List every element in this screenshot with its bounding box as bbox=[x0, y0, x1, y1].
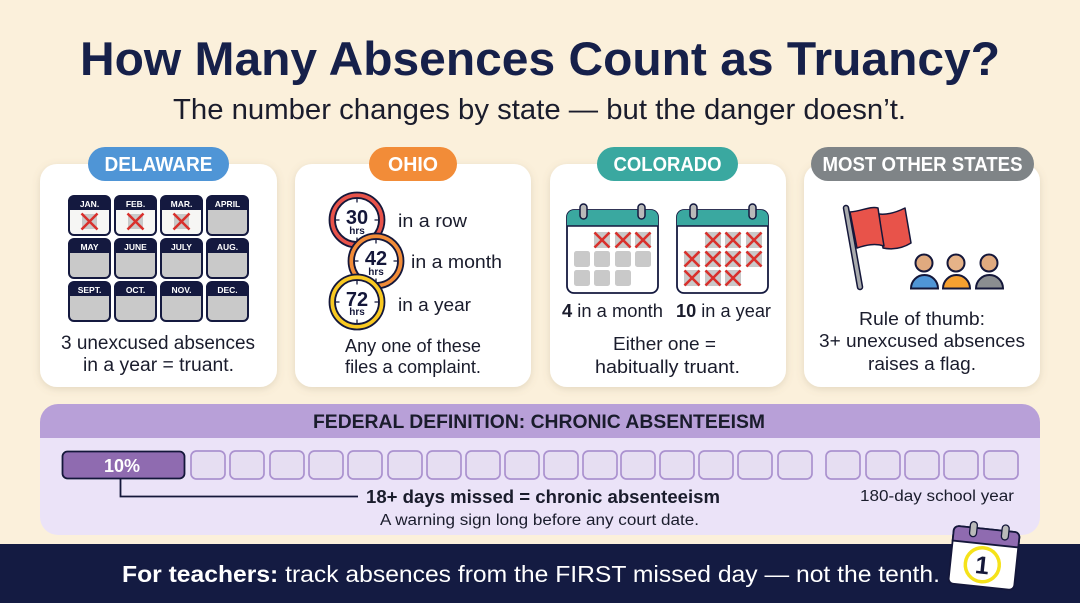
school year label: 180-day school year bbox=[860, 488, 1014, 505]
school year day blocks bbox=[191, 451, 1018, 479]
Colorado calendar labels: 10 in a year bbox=[676, 301, 771, 321]
panel: Delaware bbox=[40, 147, 277, 387]
panel: Ohio bbox=[295, 147, 531, 387]
most other states label: MOST OTHER STATES bbox=[822, 154, 1022, 176]
Delaware caption: in a year = truant. bbox=[83, 355, 234, 376]
icon: 30 hours clock bbox=[330, 192, 384, 248]
Delaware label: DELAWARE bbox=[104, 154, 212, 176]
icon: month calendar with 10 limit bbox=[677, 204, 768, 293]
most other states caption: Rule of thumb: bbox=[859, 308, 985, 329]
icon: 72 hours clock bbox=[330, 274, 384, 330]
icon: twelve month calendars: NOV. bbox=[171, 285, 192, 295]
panel: Colorado bbox=[550, 147, 786, 387]
icon: twelve month calendars: SEPT. bbox=[78, 285, 101, 295]
icon: month calendar with 4 limit bbox=[567, 204, 658, 293]
Ohio label bbox=[369, 147, 457, 181]
most other states caption: raises a flag. bbox=[868, 353, 976, 374]
icon: 42 hours clock: hrs bbox=[368, 267, 384, 278]
teacher tip: For teachers: track absences from the FIRST missed day — not the tenth. bbox=[122, 561, 940, 587]
icon: twelve month calendars: OCT. bbox=[126, 285, 145, 295]
10 percent block: 10% bbox=[104, 456, 140, 476]
icon: 30 hours clock: 30 bbox=[346, 207, 368, 229]
federal heading: FEDERAL DEFINITION: CHRONIC ABSENTEEISM bbox=[313, 411, 765, 433]
icon: 72 hours clock: 72 bbox=[346, 289, 368, 311]
icon: red flag bbox=[846, 208, 911, 287]
10 percent block bbox=[62, 452, 184, 478]
icon: twelve month calendars: JULY bbox=[171, 242, 192, 252]
icon: 72 hours clock: hrs bbox=[349, 307, 365, 318]
Ohio caption bbox=[345, 336, 481, 377]
Colorado caption bbox=[595, 333, 740, 377]
icon: day one calendar: 1 bbox=[974, 551, 991, 580]
Colorado label: COLORADO bbox=[614, 154, 722, 176]
Colorado calendar labels bbox=[562, 301, 771, 321]
footer bar bbox=[0, 544, 1080, 603]
panel: most other states bbox=[804, 147, 1040, 387]
icon: day one calendar bbox=[948, 520, 1020, 590]
warning note: A warning sign long before any court date. bbox=[380, 512, 699, 529]
most other states caption: 3+ unexcused absences bbox=[819, 330, 1025, 351]
Delaware label bbox=[88, 147, 229, 181]
chronic absenteeism statement: 18+ days missed = chronic absenteeism bbox=[366, 486, 720, 507]
Delaware caption bbox=[61, 333, 255, 376]
Colorado calendar labels: 4 in a month bbox=[562, 301, 663, 321]
icon: twelve month calendars: MAR. bbox=[171, 199, 192, 209]
icon: twelve month calendars bbox=[69, 196, 248, 321]
Colorado caption: Either one = bbox=[613, 333, 716, 354]
icon: twelve month calendars: AUG. bbox=[217, 242, 238, 252]
Ohio time labels: in a row bbox=[398, 210, 468, 231]
icon: twelve month calendars: MAY bbox=[80, 242, 99, 252]
icon: 30 hours clock: hrs bbox=[349, 226, 365, 237]
icon: twelve month calendars: APRIL bbox=[215, 199, 240, 209]
Ohio time labels: in a month bbox=[411, 251, 502, 272]
Ohio caption: files a complaint. bbox=[345, 357, 481, 377]
Colorado caption: habitually truant. bbox=[595, 356, 740, 377]
Ohio label: OHIO bbox=[388, 154, 438, 176]
Ohio time labels bbox=[398, 210, 502, 315]
most other states label bbox=[811, 147, 1034, 181]
Colorado label bbox=[597, 147, 738, 181]
icon: twelve month calendars: JUNE bbox=[124, 242, 147, 252]
subtitle: The number changes by state — but the danger doesn’t. bbox=[173, 94, 906, 126]
title: How Many Absences Count as Truancy? bbox=[80, 32, 1000, 85]
icon: 42 hours clock: 42 bbox=[365, 248, 387, 270]
panel: federal definition bbox=[40, 404, 1040, 535]
Ohio time labels: in a year bbox=[398, 294, 471, 315]
icon: twelve month calendars: JAN. bbox=[80, 199, 99, 209]
most other states caption bbox=[819, 308, 1025, 374]
icon: twelve month calendars: DEC. bbox=[217, 285, 238, 295]
Ohio caption: Any one of these bbox=[345, 336, 481, 356]
icon: twelve month calendars: FEB. bbox=[126, 199, 145, 209]
connector arrow bbox=[120, 479, 358, 496]
Delaware caption: 3 unexcused absences bbox=[61, 333, 255, 354]
icon: 42 hours clock bbox=[348, 234, 404, 288]
icon: three students bbox=[911, 254, 1003, 288]
